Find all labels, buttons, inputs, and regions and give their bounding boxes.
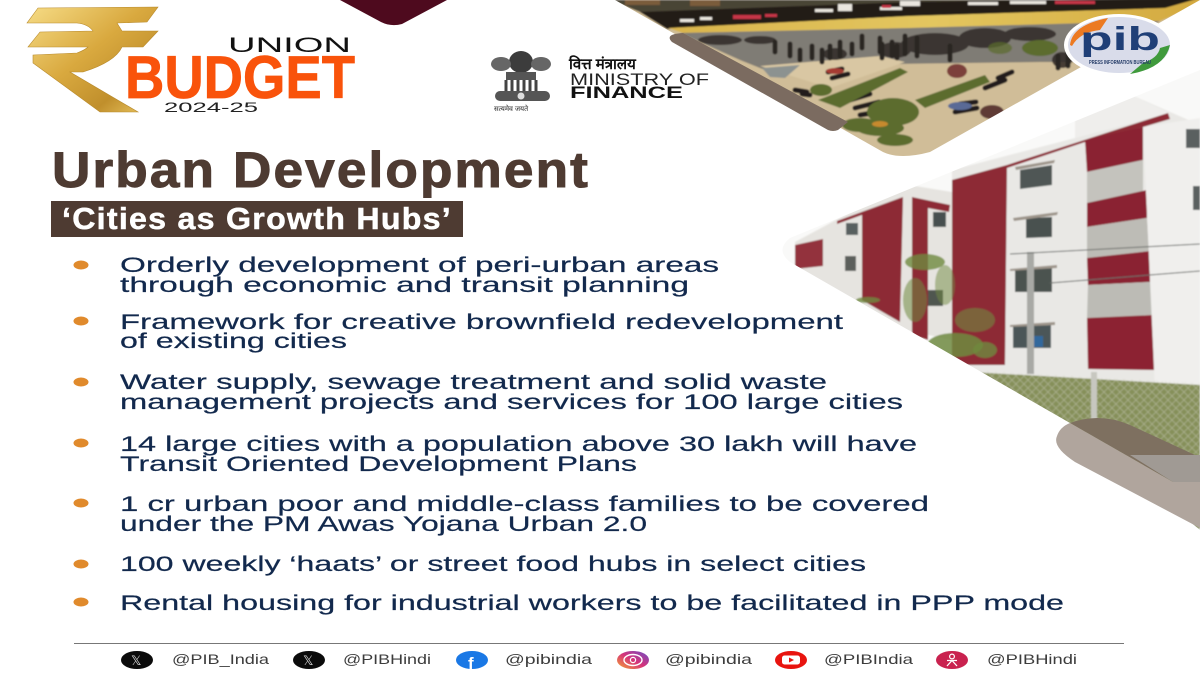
text: emblem motto: सत्यमेव जयते xyxy=(494,104,529,113)
handle: PIB_India: @PIB_India xyxy=(172,651,269,667)
bullet 2: of existing cities xyxy=(120,330,347,353)
logo: Ministry of Finance xyxy=(491,51,709,113)
crowd xyxy=(775,36,1068,68)
bullet 5: 1 cr urban poor and middle-class families to be covered xyxy=(120,493,929,516)
icon: X: 𝕏 xyxy=(131,653,141,668)
text: union: UNION xyxy=(228,34,351,57)
maroon corner shape xyxy=(340,0,447,25)
icon: YouTube xyxy=(775,651,807,669)
bullet 6: 100 weekly ‘haats’ or street food hubs in select cities xyxy=(120,553,866,576)
bullet 2 xyxy=(74,311,843,353)
bullet 4: Transit Oriented Development Plans xyxy=(120,453,637,476)
bullet 5 xyxy=(74,493,929,536)
icon: Facebook: f xyxy=(468,654,474,673)
bullet 3 xyxy=(74,371,903,414)
logo: PIB xyxy=(1064,14,1174,76)
brown diagonal pill xyxy=(670,33,848,131)
icon: gold rupee symbol xyxy=(27,7,158,112)
handle: PIBHindi Koo: @PIBHindi xyxy=(987,651,1077,667)
dark shop signage band xyxy=(640,0,1200,29)
bullet 1 xyxy=(74,254,719,297)
bullet 5: under the PM Awas Yojana Urban 2.0 xyxy=(120,513,647,536)
brown pill bottom right xyxy=(1056,418,1200,528)
handle: pibindia: @pibindia xyxy=(505,651,592,667)
footer divider xyxy=(74,643,1124,644)
handle: PIBHindi: @PIBHindi xyxy=(343,651,431,667)
photo: market plaza xyxy=(610,0,1200,160)
beige floor details xyxy=(760,56,905,88)
bullet 6 xyxy=(74,553,866,576)
icon: X Hindi xyxy=(293,651,325,669)
icon: X Hindi: 𝕏 xyxy=(303,653,313,668)
icon: Facebook xyxy=(456,651,488,673)
text: budget: BUDGET xyxy=(125,44,355,111)
text: ministry of: MINISTRY OF xyxy=(570,71,709,89)
bullet 1: Orderly development of peri-urban areas xyxy=(120,254,719,277)
grey pavement xyxy=(680,21,1160,72)
social media footer xyxy=(121,651,1077,673)
left building xyxy=(795,184,952,340)
tree xyxy=(856,254,997,358)
text: ministry Hindi: वित्त मंत्रालय xyxy=(568,55,637,73)
yellow awning xyxy=(668,0,1200,33)
text: year: 2024-25 xyxy=(164,99,258,115)
bullet 7: Rental housing for industrial workers to be facilitated in PPP mode xyxy=(120,592,1064,615)
bullet list xyxy=(74,254,1064,615)
bullet 7 xyxy=(74,592,1064,615)
bullet 3: Water supply, sewage treatment and solid waste xyxy=(120,371,827,394)
logo: Union Budget xyxy=(27,7,355,115)
grass and fence xyxy=(970,370,1200,530)
bullet 1: through economic and transit planning xyxy=(120,274,689,297)
handle: pibindia Instagram: @pibindia xyxy=(665,651,752,667)
crowd masses xyxy=(698,27,1072,68)
title: Urban Development xyxy=(52,142,590,198)
photo: building housing xyxy=(794,96,1200,530)
bullet 3: management projects and services for 100 large cities xyxy=(120,391,903,414)
icon: national emblem xyxy=(491,51,551,101)
bullet 2: Framework for creative brownfield redevelopment xyxy=(120,311,843,334)
main building xyxy=(952,86,1200,390)
bullet 4: 14 large cities with a population above 30 lakh will have xyxy=(120,433,917,456)
hedges xyxy=(810,40,1058,146)
icon: Koo xyxy=(936,651,968,669)
bullet 4 xyxy=(74,433,917,476)
handle: PIBIndia: @PIBIndia xyxy=(824,651,913,667)
icon: Instagram xyxy=(617,651,649,669)
subtitle banner: ‘Cities as Growth Hubs’ xyxy=(62,201,452,236)
text: pib: pib xyxy=(1080,20,1160,57)
text: press information bureau: PRESS INFORMATION BUREAU xyxy=(1089,60,1151,66)
icon: X xyxy=(121,651,153,669)
text: finance: FINANCE xyxy=(570,83,683,102)
upper scenery xyxy=(615,0,1051,14)
